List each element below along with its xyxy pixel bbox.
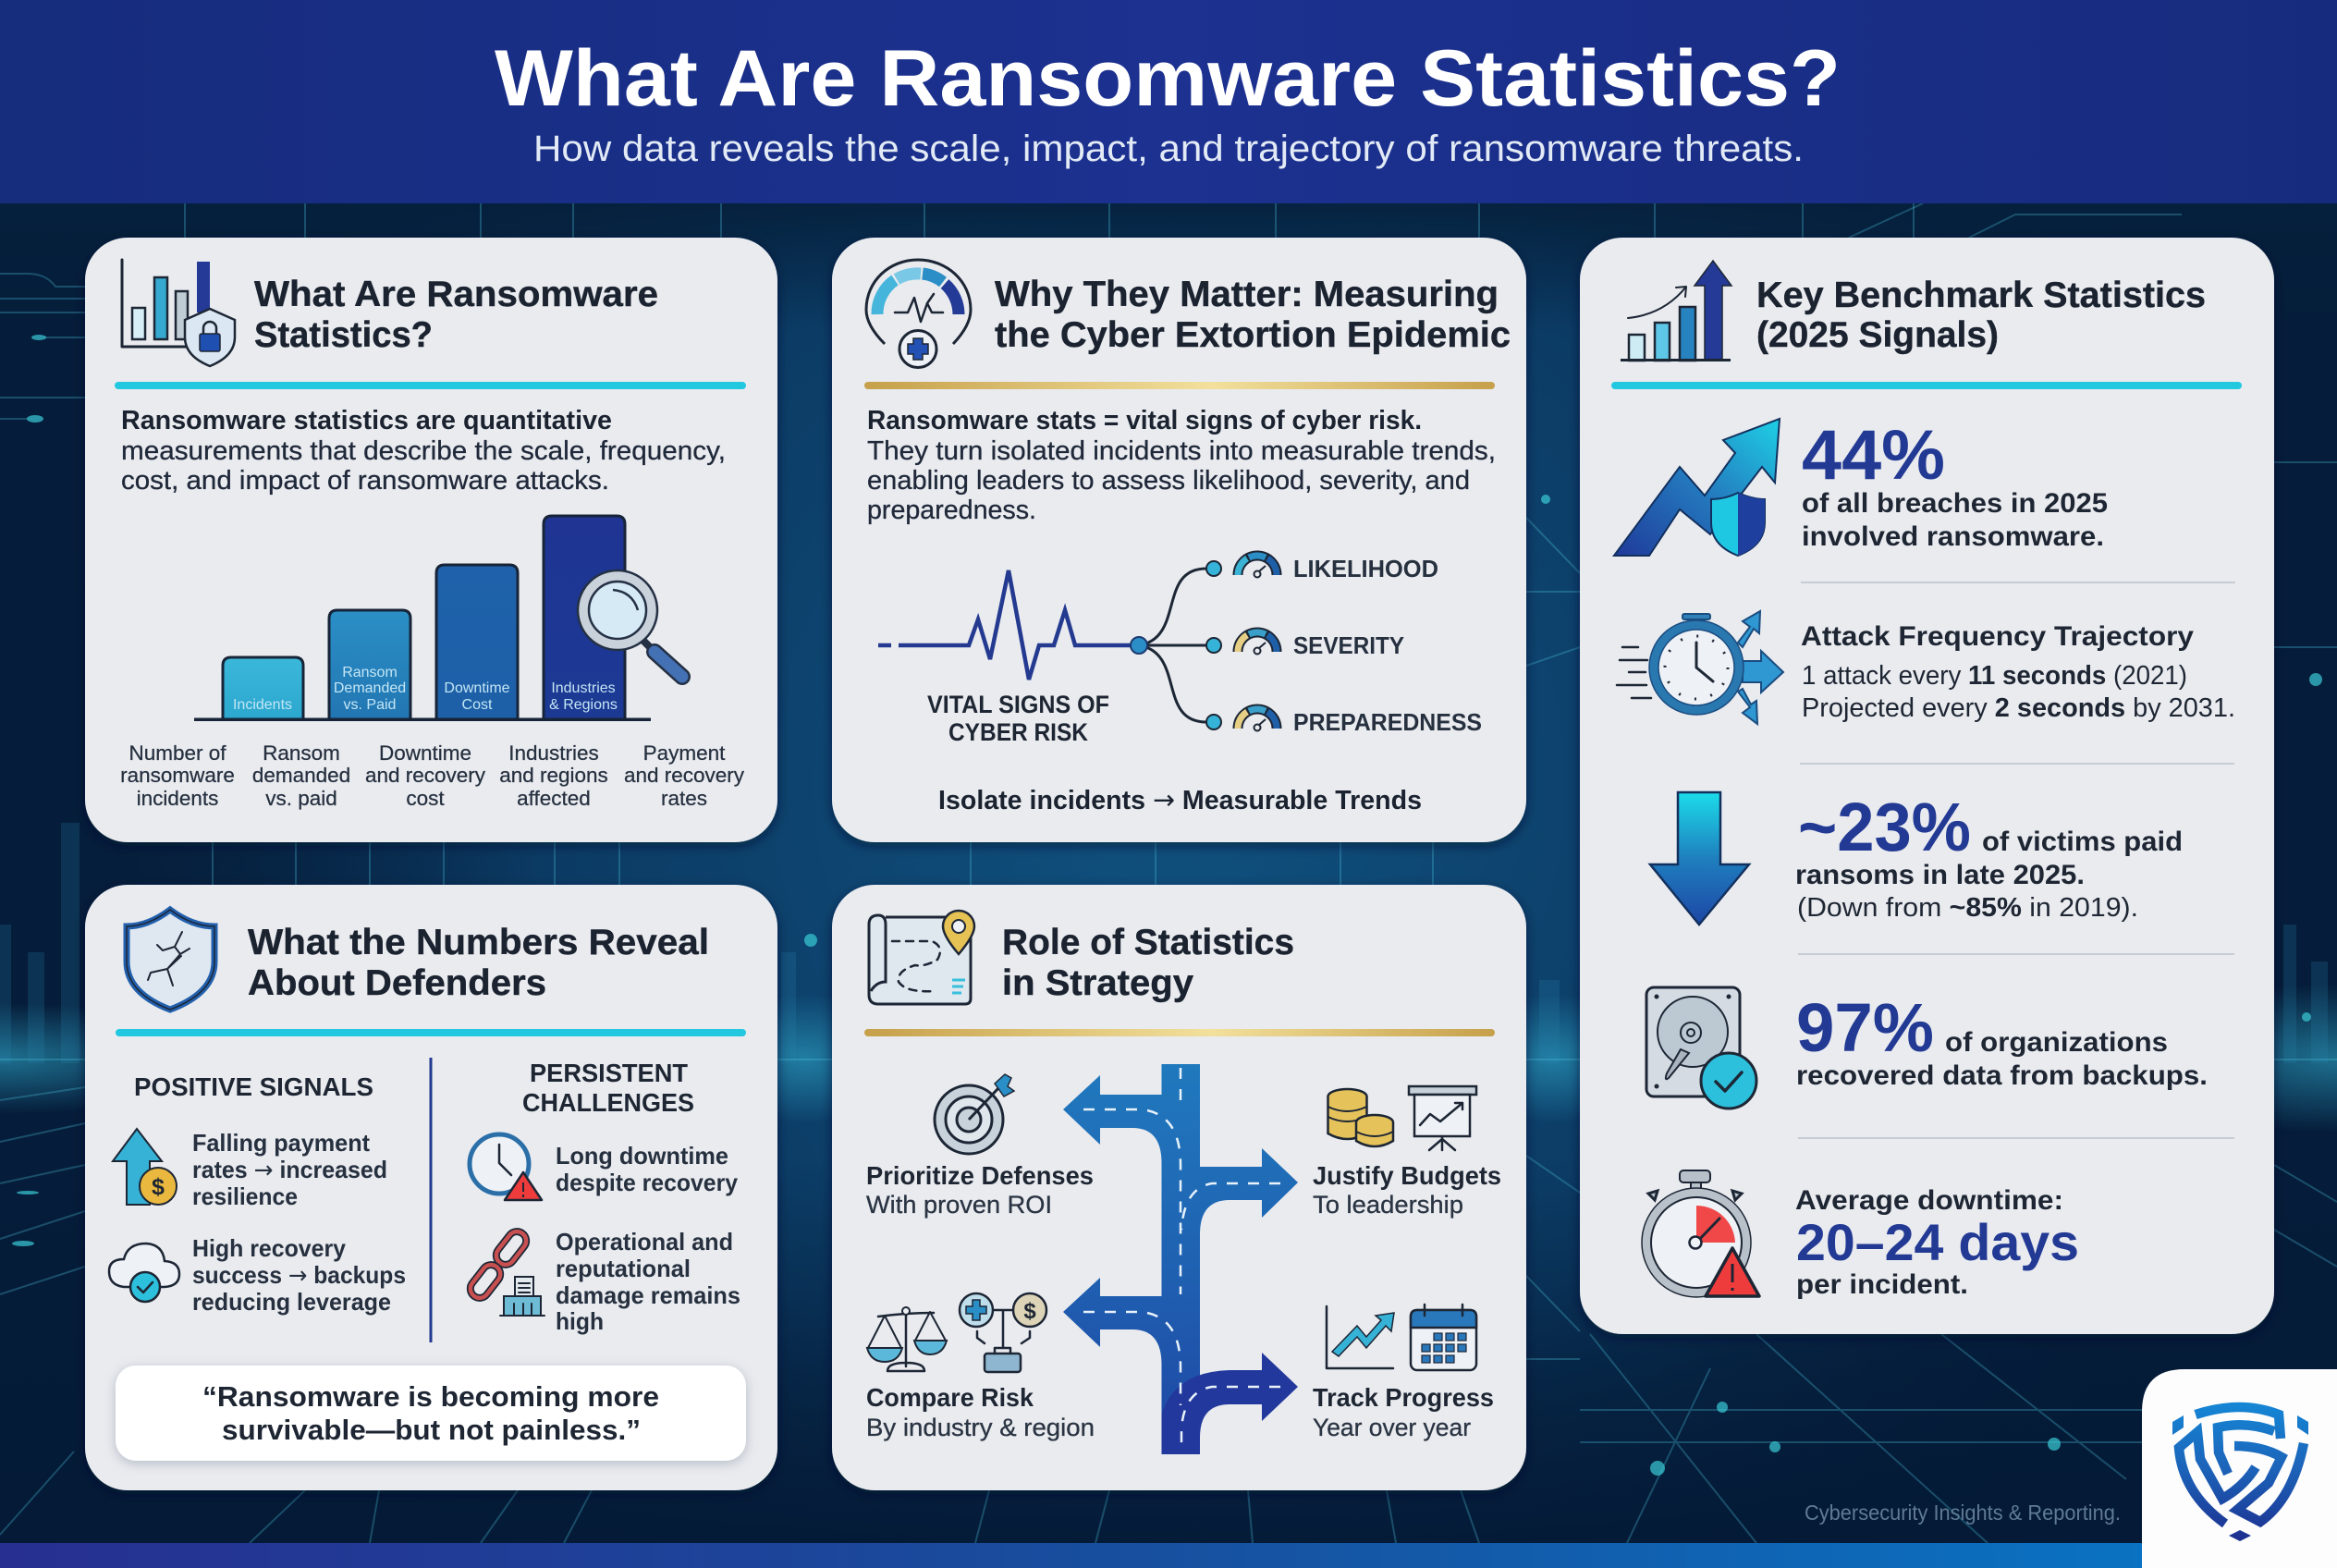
- logo panel: [2142, 1369, 2337, 1568]
- icon: map route with pin: [869, 911, 974, 1004]
- bar chart: Ransom: [342, 665, 398, 680]
- item: track progress: Year over year: [1313, 1414, 1471, 1441]
- heading: [248, 923, 709, 1003]
- heading: Key Benchmark Statistics: [1756, 276, 2206, 315]
- stat: 44 percent: involved ransomware.: [1802, 521, 2104, 552]
- definition text: [121, 406, 726, 496]
- column: persistent challenges: Long downtime: [556, 1142, 728, 1170]
- takeaway line: Isolate incidents → Measurable Trends: [938, 784, 1422, 815]
- bar chart: Industries: [551, 680, 616, 696]
- metric labels: ransomware: [120, 764, 235, 787]
- item: prioritize defenses: Prioritize Defenses: [866, 1161, 1094, 1190]
- stat: 97 percent recovered: recovered data from backups.: [1796, 1060, 2208, 1091]
- heading: [254, 275, 658, 355]
- bar chart: Downtime: [444, 680, 510, 696]
- panel: key benchmark statistics: [1580, 238, 2274, 1334]
- icon: up arrow with dollar coin: $: [152, 1174, 165, 1200]
- icon: coins and presentation board: [1328, 1086, 1476, 1150]
- definition text: cost, and impact of ransomware attacks.: [121, 466, 609, 496]
- column: persistent challenges: CHALLENGES: [522, 1088, 694, 1117]
- icon: gauge with medical cross: [866, 260, 971, 368]
- heading: in Strategy: [1002, 963, 1193, 1003]
- stat: 44 percent: of all breaches in 2025: [1802, 488, 2108, 519]
- icon: cracked shield: [127, 910, 214, 1010]
- metric labels: and recovery: [365, 764, 486, 787]
- item: track progress: Track Progress: [1313, 1383, 1494, 1412]
- gauge: severity: SEVERITY: [1293, 631, 1404, 659]
- stat: 23 percent paid: [1650, 789, 2183, 925]
- metric labels: Ransom: [263, 741, 340, 765]
- stat: attack frequency: [1617, 611, 2235, 724]
- chart: heartbeat line branching to risk dimensions: VITAL SIGNS OF: [927, 691, 1109, 718]
- callout: quote: [116, 1366, 746, 1461]
- metric labels: Payment: [643, 741, 726, 765]
- definition text: Ransomware statistics are quantitative: [121, 406, 612, 435]
- metric labels: incidents: [137, 787, 218, 810]
- bar chart: Demanded: [334, 680, 406, 696]
- column: persistent challenges: [467, 1059, 740, 1335]
- stat: attack frequency: 1 attack every 11 seconds (2021): [1802, 661, 2187, 691]
- metric labels: and recovery: [624, 764, 745, 787]
- item: prioritize defenses: [866, 1074, 1094, 1219]
- stat: 44 percent: [1614, 416, 2108, 556]
- stat: 23 percent paid: ~23%: [1798, 789, 1971, 865]
- icon: trend chart and calendar: [1327, 1305, 1476, 1370]
- column: persistent challenges: damage remains: [556, 1281, 740, 1309]
- metric labels: Number of: [128, 741, 226, 765]
- stat: 97 percent recovered: [1646, 987, 2208, 1109]
- icon: down arrow: [1650, 792, 1749, 925]
- icon: chart with shield lock: [122, 260, 235, 366]
- stat: average downtime: Average downtime:: [1795, 1185, 2063, 1216]
- column: positive signals: POSITIVE SIGNALS: [134, 1072, 373, 1101]
- icon: target with arrow: [935, 1074, 1014, 1154]
- item: track progress: [1313, 1305, 1494, 1441]
- metric labels: vs. paid: [265, 787, 337, 810]
- metric labels: Downtime: [379, 741, 471, 765]
- panel: what the numbers reveal: [85, 885, 777, 1490]
- footer bar: [0, 1543, 2337, 1568]
- column: persistent challenges: despite recovery: [556, 1169, 739, 1196]
- column: persistent challenges: reputational: [556, 1255, 691, 1282]
- heading: What Are Ransomware: [254, 275, 658, 314]
- gauge: preparedness: PREPAREDNESS: [1293, 708, 1482, 736]
- panel: what are ransomware statistics: [85, 238, 777, 842]
- explanation text: enabling leaders to assess likelihood, severity, and: [867, 466, 1470, 496]
- stat: 23 percent paid: ransoms in late 2025.: [1795, 860, 2085, 890]
- column: positive signals: success → backups: [192, 1261, 406, 1290]
- stat: 23 percent paid: (Down from ~85% in 2019).: [1797, 893, 2138, 923]
- icon: clock with warning: [470, 1134, 542, 1200]
- column: positive signals: Falling payment: [192, 1129, 370, 1157]
- column: persistent challenges: PERSISTENT: [530, 1059, 688, 1087]
- icon: rising arrow with shield: [1614, 419, 1780, 556]
- heading: About Defenders: [248, 963, 546, 1003]
- metric labels: [120, 741, 745, 810]
- item: justify budgets: To leadership: [1313, 1191, 1463, 1219]
- stat: attack frequency: Projected every 2 seconds by 2031.: [1802, 693, 2235, 723]
- metric labels: and regions: [499, 764, 608, 787]
- panel: why they matter: [832, 238, 1526, 842]
- bar chart: Incidents: [233, 697, 292, 713]
- explanation text: [867, 406, 1496, 525]
- icon: stopwatch with arrows: [1617, 611, 1783, 724]
- icon: scales and risk tree: $: [1023, 1299, 1036, 1324]
- icon: cloud with check: [109, 1243, 179, 1302]
- heading: (2025 Signals): [1756, 315, 1999, 355]
- icon: scales and risk tree: [867, 1293, 1046, 1372]
- gauge: severity: [1238, 631, 1404, 659]
- item: justify budgets: Justify Budgets: [1313, 1161, 1501, 1190]
- heading: Why They Matter: Measuring: [995, 275, 1499, 314]
- icon: stopwatch with warning: [1642, 1170, 1759, 1297]
- stat: average downtime: 20–24 days: [1796, 1213, 2079, 1271]
- panel: role of statistics in strategy: [832, 885, 1526, 1490]
- footer credit: Cybersecurity Insights & Reporting.: [1805, 1501, 2121, 1525]
- stat: average downtime: per incident.: [1796, 1269, 1968, 1300]
- chart: heartbeat line branching to risk dimensions: CYBER RISK: [948, 718, 1088, 746]
- icon: logo shield: [2172, 1407, 2308, 1541]
- stat: 44 percent: 44%: [1802, 416, 1945, 495]
- explanation text: They turn isolated incidents into measurable trends,: [867, 436, 1496, 466]
- explanation text: preparedness.: [867, 496, 1036, 525]
- stat: average downtime: [1642, 1170, 2079, 1300]
- stat: 23 percent paid: of victims paid: [1982, 827, 2183, 857]
- column: positive signals: [109, 1072, 406, 1316]
- stat: 97 percent recovered: of organizations: [1945, 1027, 2168, 1058]
- metric labels: cost: [406, 787, 445, 810]
- explanation text: Ransomware stats = vital signs of cyber risk.: [867, 406, 1422, 435]
- column: persistent challenges: Operational and: [556, 1228, 733, 1256]
- bar chart: [194, 516, 651, 721]
- column: positive signals: reducing leverage: [192, 1288, 391, 1316]
- icon: hard drive with check: [1646, 987, 1756, 1109]
- icon: rising bars and arrow: [1621, 261, 1731, 361]
- stat: attack frequency: Attack Frequency Trajectory: [1801, 621, 2194, 652]
- bar chart: vs. Paid: [344, 697, 396, 713]
- bar chart: & Regions: [549, 697, 618, 713]
- column: positive signals: rates → increased: [192, 1156, 387, 1184]
- metric labels: demanded: [252, 764, 350, 787]
- heading: [1002, 923, 1294, 1003]
- metric labels: Industries: [508, 741, 599, 765]
- heading: the Cyber Extortion Epidemic: [995, 315, 1511, 355]
- chart: heartbeat line branching to risk dimensions: [878, 561, 1221, 746]
- heading: What the Numbers Reveal: [248, 923, 709, 962]
- icon: magnifying glass: [578, 570, 682, 677]
- definition text: measurements that describe the scale, frequency,: [121, 436, 726, 466]
- item: compare risk: Compare Risk: [866, 1383, 1034, 1412]
- heading: [1756, 276, 2206, 355]
- item: compare risk: [866, 1293, 1095, 1441]
- column: positive signals: High recovery: [192, 1234, 347, 1262]
- stat: 97 percent recovered: 97%: [1796, 989, 1934, 1066]
- subtitle: How data reveals the scale, impact, and trajectory of ransomware threats.: [533, 129, 1804, 169]
- heading: [995, 275, 1511, 355]
- item: compare risk: By industry & region: [866, 1414, 1095, 1441]
- bar chart: Cost: [462, 697, 493, 713]
- heading: Role of Statistics: [1002, 923, 1294, 962]
- icon: up arrow with dollar coin: [113, 1129, 177, 1205]
- callout: quote: survivable—but not painless.”: [222, 1414, 641, 1446]
- heading: Statistics?: [254, 315, 433, 355]
- header banner: [0, 0, 2337, 203]
- item: prioritize defenses: With proven ROI: [866, 1191, 1052, 1219]
- metric labels: affected: [517, 787, 591, 810]
- column: persistent challenges: high: [556, 1307, 604, 1335]
- diagram: branching road arrows: [1063, 1064, 1298, 1454]
- column: positive signals: resilience: [192, 1182, 298, 1210]
- title: What Are Ransomware Statistics?: [495, 34, 1841, 123]
- callout: quote: “Ransomware is becoming more: [202, 1380, 659, 1413]
- item: justify budgets: [1313, 1086, 1501, 1219]
- gauge: likelihood: LIKELIHOOD: [1293, 555, 1438, 582]
- icon: broken chain and building: [467, 1228, 544, 1316]
- metric labels: rates: [661, 787, 707, 810]
